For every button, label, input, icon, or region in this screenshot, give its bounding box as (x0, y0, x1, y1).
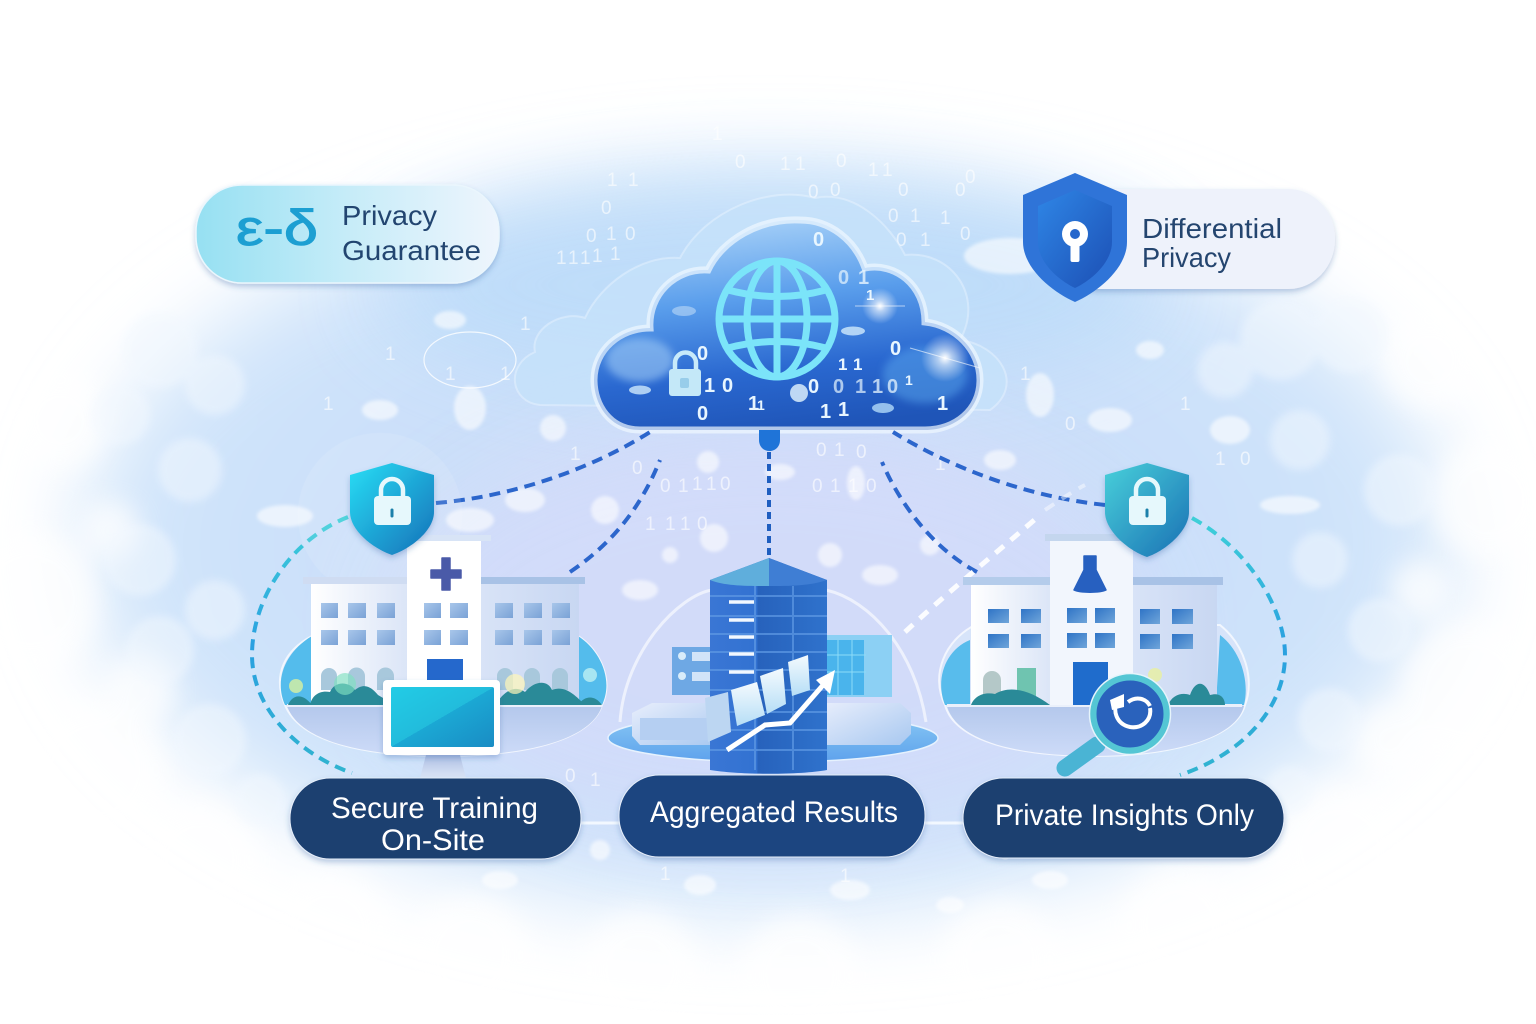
binary in cloud: 1 (872, 376, 883, 398)
binary in cloud: 1 (937, 393, 948, 415)
binary data particles: 1 (795, 154, 806, 175)
node: hospital (280, 433, 606, 778)
badge: epsilon-delta privacy guarantee: Privacy (342, 200, 437, 231)
binary data particles: 0 (856, 442, 867, 463)
binary in cloud (697, 229, 948, 425)
binary data particles: 0 (565, 766, 576, 787)
platform (608, 635, 938, 762)
badge: epsilon-delta privacy guarantee: ε-δ (236, 200, 318, 256)
binary in cloud: 1 (905, 372, 913, 388)
binary data particles: 1 (848, 476, 859, 497)
binary data particles: 0 (720, 474, 731, 495)
icon: shield lock right (1105, 463, 1189, 557)
binary data particles: 1 (570, 444, 581, 465)
cloud sparkle lights (629, 288, 980, 413)
label: Secure Training On-Site (290, 778, 581, 859)
binary in cloud: 1 (704, 375, 715, 397)
binary data particles: 0 (955, 180, 966, 201)
badge: epsilon-delta privacy guarantee (196, 185, 499, 283)
binary data particles: 0 (1000, 844, 1011, 865)
binary data particles: 1 (592, 246, 603, 267)
binary data particles: 1 (445, 364, 456, 385)
binary data particles: 1 (385, 344, 396, 365)
binary in cloud: 1 (853, 355, 862, 374)
binary data particles: 1 (678, 476, 689, 497)
binary in cloud: 0 (887, 376, 898, 398)
binary in cloud: 0 (833, 376, 844, 398)
binary data particles: 1 (920, 230, 931, 251)
binary in cloud: 0 (838, 267, 849, 289)
chart: bars and rising arrow (705, 655, 835, 750)
binary data particles: 0 (625, 224, 636, 245)
icon: globe (719, 261, 835, 377)
binary data particles: 1 (628, 170, 639, 191)
node: laboratory (939, 463, 1249, 768)
binary data particles: 1 (935, 454, 946, 475)
binary data particles: 0 (1240, 449, 1251, 470)
binary data particles: 1 (706, 474, 717, 495)
binary in cloud: 0 (808, 376, 819, 398)
binary data particles: 1 (840, 866, 851, 887)
binary data particles: 1 (568, 248, 579, 269)
central cloud (594, 220, 980, 430)
label: Aggregated Results (619, 775, 925, 857)
binary data particles: 1 (834, 440, 845, 461)
icon: magnifying glass (1065, 674, 1170, 768)
binary data particles: 1 (882, 160, 893, 181)
binary data particles: 1 (830, 476, 841, 497)
binary data particles: 0 (697, 514, 708, 535)
binary data particles: 0 (816, 440, 827, 461)
binary data particles: 1 (868, 160, 879, 181)
binary in cloud: 0 (813, 229, 824, 251)
binary data particles: 0 (965, 167, 976, 188)
bokeh (257, 238, 1320, 913)
binary in cloud: 0 (697, 343, 708, 365)
icon: cloud padlock (669, 353, 701, 396)
node: data center (608, 558, 938, 774)
badge: differential privacy: Differential (1142, 213, 1282, 244)
binary data particles: 1 (500, 364, 511, 385)
binary in cloud: 0 (722, 375, 733, 397)
binary data particles: 0 (960, 224, 971, 245)
binary data particles: 0 (896, 230, 907, 251)
binary data particles: 1 (1180, 394, 1191, 415)
binary data particles: 0 (586, 226, 597, 247)
binary data particles: 1 (910, 206, 921, 227)
binary data particles: 1 (665, 514, 676, 535)
binary in cloud: 1 (757, 397, 765, 413)
binary in cloud: 1 (866, 287, 874, 304)
binary in cloud: 0 (697, 403, 708, 425)
binary data particles: 1 (590, 770, 601, 791)
foliage (288, 683, 602, 705)
binary in cloud: 0 (890, 338, 901, 360)
binary in cloud: 1 (838, 355, 847, 374)
icon: shield lock left (350, 463, 434, 555)
binary in cloud: 1 (820, 401, 831, 423)
label: Aggregated Results: Aggregated Results (650, 796, 898, 829)
icon: monitor (383, 680, 500, 778)
binary data particles: 1 (780, 154, 791, 175)
binary data particles: 1 (610, 244, 621, 265)
binary data particles: 1 (607, 170, 618, 191)
binary data particles: 1 (556, 248, 567, 269)
binary data particles (323, 124, 1251, 887)
binary data particles: 1 (940, 208, 951, 229)
label: Private Insights Only: Private Insights Only (995, 799, 1254, 832)
dome (620, 590, 926, 722)
lab building (963, 534, 1225, 705)
binary in cloud: 1 (748, 393, 759, 415)
binary data particles: 0 (808, 182, 819, 203)
binary data particles: 0 (1065, 414, 1076, 435)
badge: differential privacy: Privacy (1142, 242, 1231, 273)
server tower (710, 558, 827, 774)
binary data particles: 0 (660, 476, 671, 497)
binary data particles: 0 (898, 180, 909, 201)
icon: medical cross (431, 558, 461, 590)
binary data particles: 1 (692, 474, 703, 495)
binary data particles: 1 (580, 248, 591, 269)
badge: differential privacy (1023, 173, 1335, 302)
binary data particles: 1 (680, 514, 691, 535)
binary data particles: 0 (632, 458, 643, 479)
hospital bubble (280, 433, 606, 756)
binary data particles: 1 (660, 864, 671, 885)
binary data particles: 0 (836, 151, 847, 172)
binary data particles: 0 (812, 476, 823, 497)
binary data particles: 0 (830, 180, 841, 201)
binary in cloud: 1 (855, 376, 866, 398)
binary in cloud: 1 (858, 267, 869, 289)
pill connectors (581, 822, 963, 824)
cloud connector node (759, 430, 780, 451)
badge: epsilon-delta privacy guarantee: Guarantee (342, 235, 481, 266)
binary data particles: 1 (606, 224, 617, 245)
binary data particles: 1 (323, 394, 334, 415)
binary data particles: 1 (1020, 364, 1031, 385)
binary data particles: 1 (520, 314, 531, 335)
label: Private Insights Only (963, 778, 1284, 858)
icon: shield keyhole (1023, 173, 1127, 302)
binary data particles: 1 (1215, 449, 1226, 470)
hospital building (288, 535, 602, 705)
binary data particles: 0 (601, 198, 612, 219)
binary data particles: 0 (866, 476, 877, 497)
label: Secure Training On-Site: Secure Training (331, 792, 538, 825)
dashed connectors (252, 432, 1285, 775)
binary data particles: 1 (645, 514, 656, 535)
binary in cloud: 1 (838, 399, 849, 421)
lab bubble (939, 625, 1249, 756)
label: Secure Training On-Site: On-Site (381, 824, 485, 857)
binary data particles: 1 (712, 124, 723, 145)
background cloud puffs (90, 297, 1436, 826)
back clouds (424, 195, 1007, 410)
binary data particles: 0 (888, 206, 899, 227)
icon: flask (1074, 556, 1106, 592)
binary data particles: 0 (735, 152, 746, 173)
